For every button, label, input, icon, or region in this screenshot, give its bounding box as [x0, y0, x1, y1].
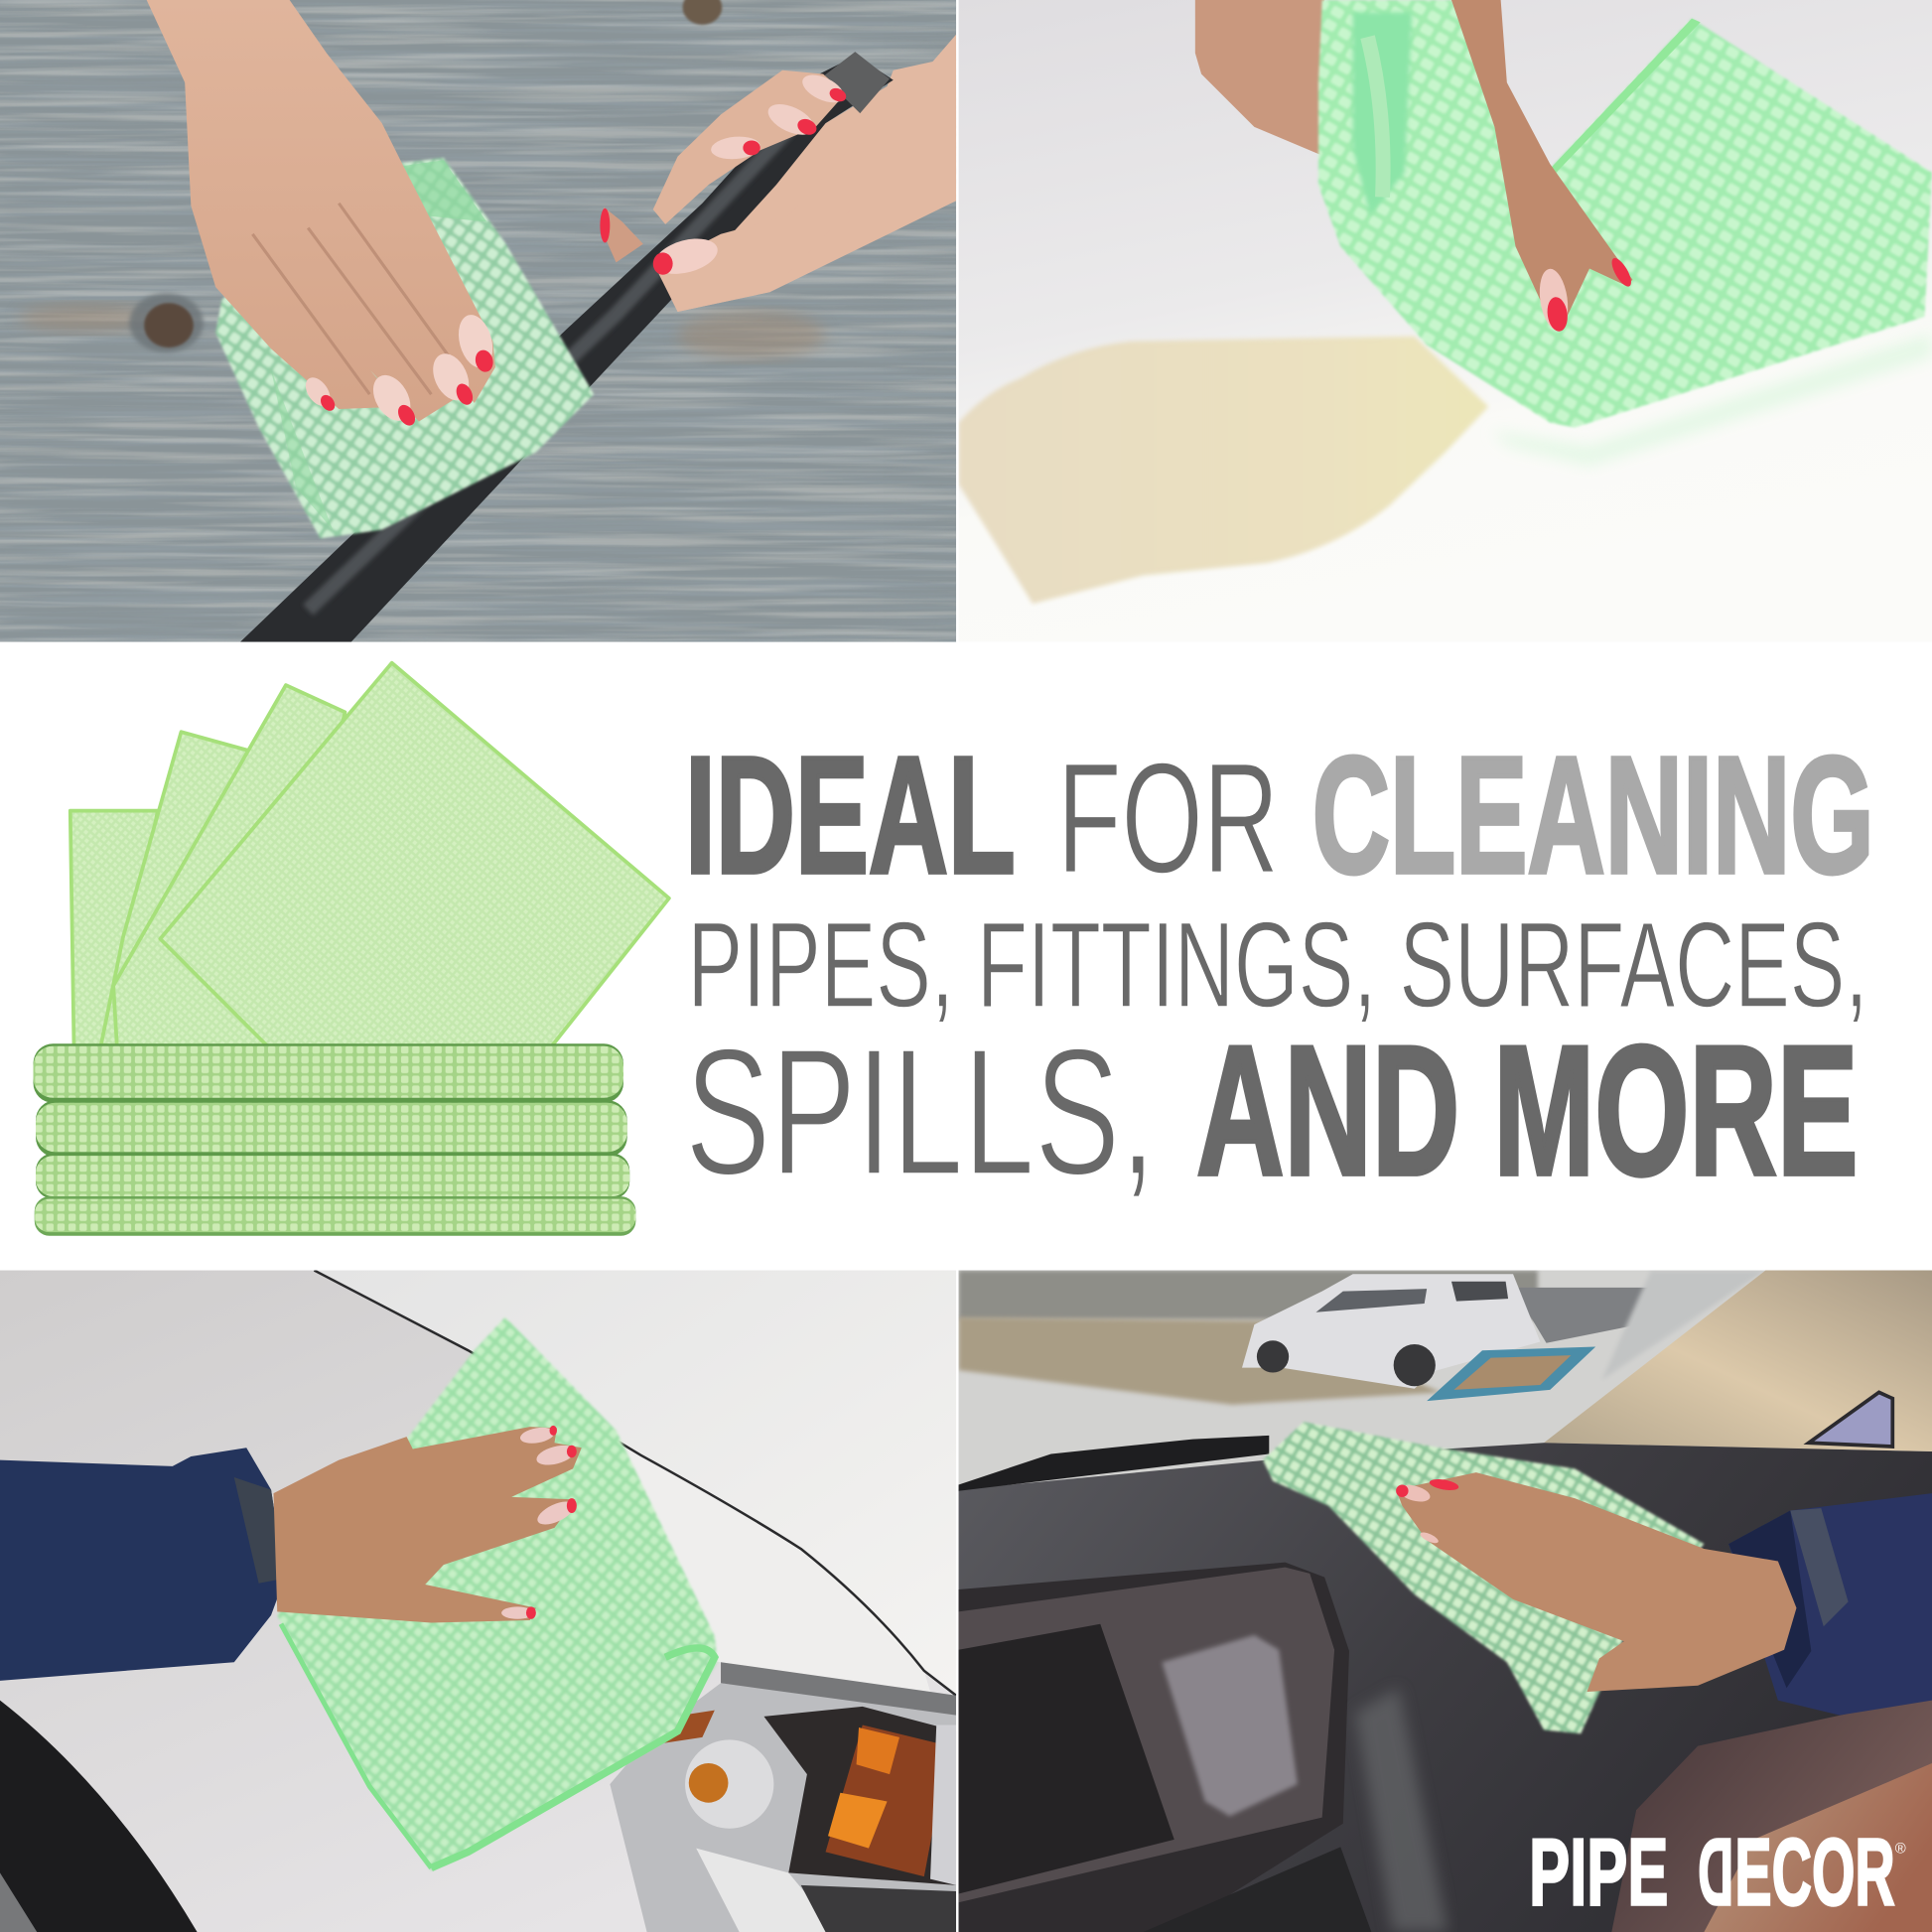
- hand fingers on cloth: [1451, 0, 1635, 333]
- wood knots and warm streaks: [19, 0, 826, 359]
- heading: ideal for cleaning: IDEAL: [685, 722, 1016, 908]
- heading: ideal for cleaning: FOR: [1057, 730, 1279, 906]
- nails: [600, 69, 848, 280]
- nails: [1539, 258, 1631, 332]
- hand on hood: [274, 1425, 582, 1622]
- text: spills and more: SPILLS,: [685, 1011, 1156, 1213]
- wiper: [959, 1436, 1269, 1491]
- rear hand body: [655, 35, 956, 312]
- text: spills and more: [685, 1008, 1859, 1214]
- nails: [301, 311, 498, 429]
- panel: cleaning a pipe on wood: [0, 0, 956, 642]
- folded cloth: [1318, 0, 1932, 428]
- brown door panel: [1611, 1696, 1932, 1932]
- headlight: [610, 1662, 956, 1932]
- cloth on pipe: [215, 158, 594, 538]
- nails: [1396, 1477, 1459, 1545]
- logo: pipe decor: D: [1698, 1820, 1733, 1926]
- cloth on dash: [1263, 1422, 1704, 1733]
- folded stack: [34, 1043, 635, 1236]
- panel: stacked cloths: [34, 663, 669, 1236]
- heading: ideal for cleaning: [685, 722, 1874, 908]
- navy sleeve: [0, 1448, 285, 1681]
- gray cars: [1513, 1288, 1655, 1343]
- side window: [1809, 1392, 1892, 1447]
- panel: wiping car hood: [0, 1271, 956, 1932]
- cloth on hood: [277, 1317, 717, 1870]
- lower fender highlight: [617, 1442, 930, 1692]
- logo: pipe decor: ®: [1895, 1842, 1906, 1858]
- wheel arch: [0, 1701, 198, 1932]
- fanned cloths: [70, 663, 669, 1047]
- hand top: [1195, 0, 1324, 157]
- center column highlight: [1355, 1688, 1448, 1932]
- little finger behind pipe: [604, 207, 643, 262]
- white car: [1242, 1274, 1540, 1389]
- logo: pipe decor: [1529, 1820, 1906, 1926]
- green reflection: [1491, 333, 1932, 466]
- instrument surround: [959, 1563, 1371, 1932]
- dash sticker: [1427, 1346, 1595, 1401]
- nails: [501, 1425, 577, 1619]
- beige pillar: [1544, 1271, 1932, 1451]
- hand on dash: [1396, 1472, 1796, 1692]
- rear hand fingers and thumb: [600, 69, 863, 312]
- spill: [959, 337, 1488, 604]
- navy sleeve: [1728, 1493, 1932, 1716]
- outside view: [959, 1271, 1821, 1492]
- panel: wiping car dashboard: [959, 1271, 1932, 1932]
- panel: wiping a spill: [959, 0, 1932, 642]
- front hand: [147, 0, 498, 429]
- dashboard: [959, 1443, 1932, 1932]
- black pipe: [240, 52, 894, 642]
- upper hood plane: [314, 1271, 956, 1696]
- logo: pipe decor: PIPE: [1529, 1820, 1668, 1926]
